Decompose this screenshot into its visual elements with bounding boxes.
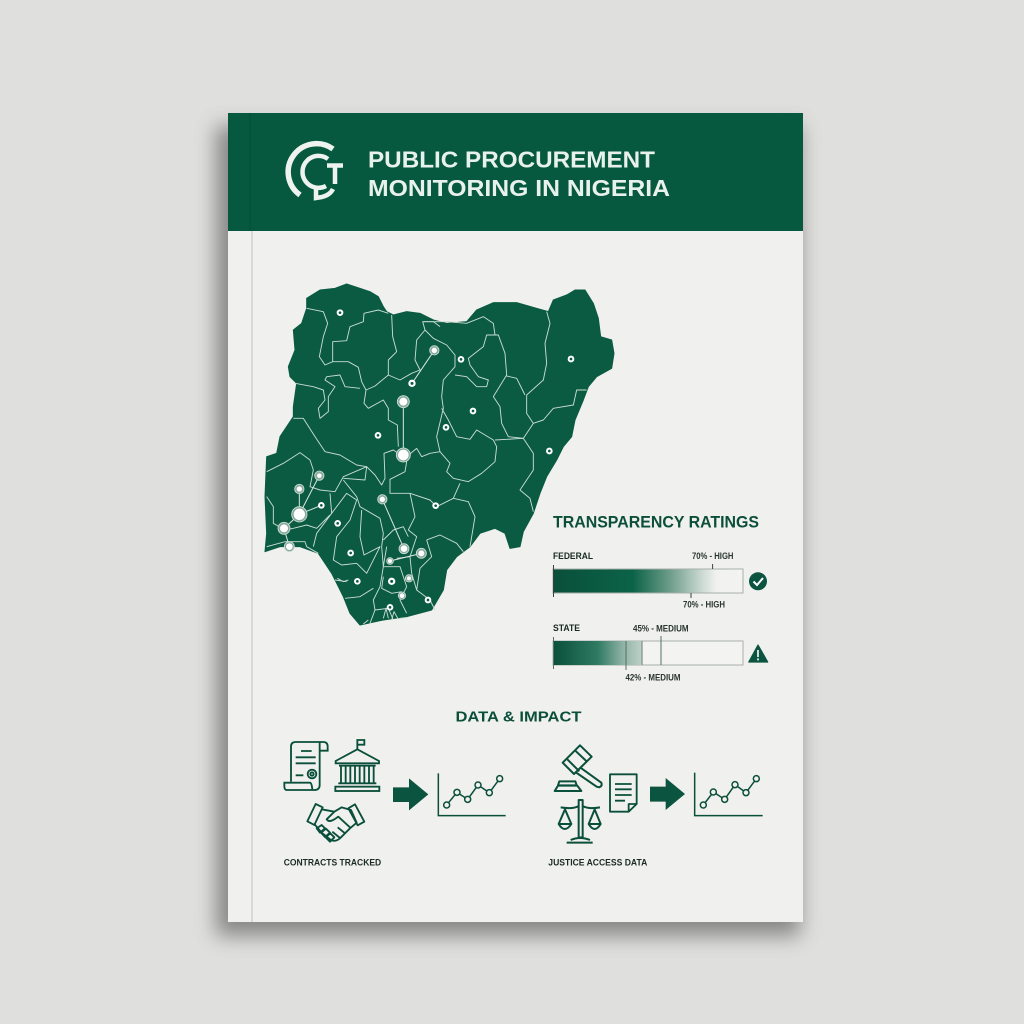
state label: STATE: [553, 623, 580, 634]
state top value: 45% - MEDIUM: [633, 623, 689, 634]
icon: gavel: [555, 745, 602, 791]
icon: CCT logo: [288, 144, 343, 198]
map markers: ringed hubs: [278, 346, 439, 599]
caption: justice access data: JUSTICE ACCESS DATA: [548, 858, 648, 868]
panel: justice access flow: [548, 745, 763, 868]
map outline: [265, 284, 614, 625]
icon: document: [610, 774, 637, 812]
federal top value: 70% - HIGH: [692, 551, 734, 562]
chart: trend line: [438, 773, 506, 816]
arrow: [650, 778, 685, 810]
panel: booklet page: [228, 113, 803, 922]
title: MONITORING IN NIGERIA: [368, 175, 670, 201]
heading: transparency ratings: TRANSPARENCY RATINGS: [553, 514, 759, 532]
map markers: small: [318, 309, 574, 611]
panel: federal rating: [553, 551, 767, 611]
state bottom value: 42% - MEDIUM: [626, 673, 681, 684]
federal bottom value: 70% - HIGH: [683, 600, 725, 611]
title: PUBLIC PROCUREMENT: [368, 146, 655, 172]
map: Nigeria states: [265, 284, 614, 625]
icon: government building: [335, 740, 379, 791]
title: [368, 146, 670, 201]
arrow: [393, 778, 428, 810]
heading: data and impact: DATA & IMPACT: [456, 710, 582, 726]
panel: contracts tracked flow: [284, 740, 506, 868]
panel: state rating: [553, 623, 768, 684]
booklet shadow: [216, 126, 800, 936]
icon: warning triangle: [749, 645, 768, 662]
icon: scales of justice: [559, 800, 601, 843]
connector lines: [284, 350, 434, 561]
icon: contract scroll: [284, 742, 328, 790]
chart: trend line: [695, 773, 763, 816]
federal bar: [553, 564, 743, 598]
caption: contracts tracked: CONTRACTS TRACKED: [284, 858, 382, 868]
federal label: FEDERAL: [553, 551, 593, 562]
state bar: [553, 636, 743, 670]
icon: check badge: [749, 572, 767, 590]
state borders: [267, 308, 587, 624]
icon: handshake: [307, 804, 364, 842]
panel: header band: [228, 113, 803, 231]
